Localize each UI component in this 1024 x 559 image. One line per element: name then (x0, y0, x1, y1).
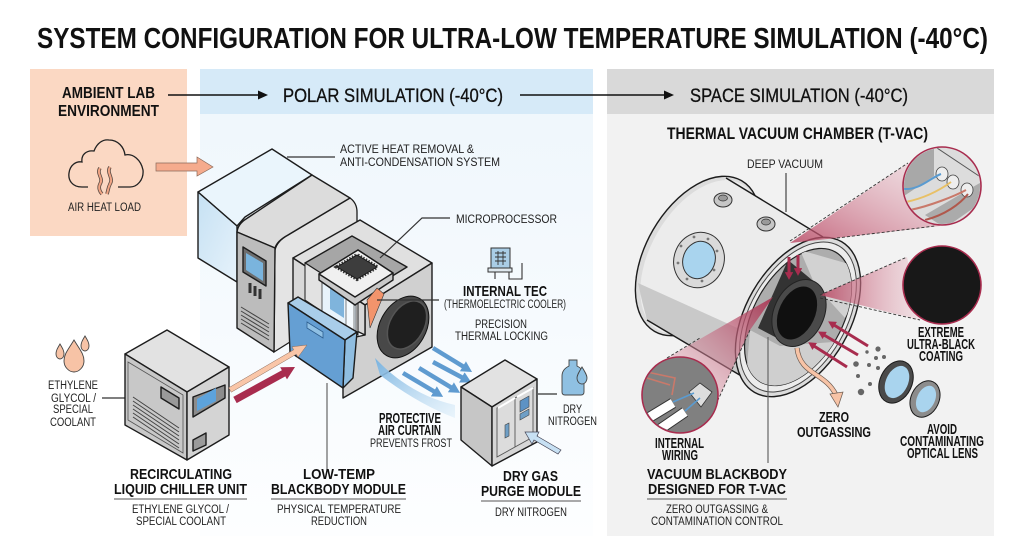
label: dry gas purge module: PURGE MODULE (481, 483, 581, 500)
arrow: outgassing (797, 348, 843, 407)
panel: ambient lab environment (30, 69, 187, 236)
ports (714, 193, 775, 231)
leader: low-temp blackbody (326, 383, 328, 470)
label: dry gas purge module: DRY GAS (503, 468, 558, 485)
arrow: coolant supply (229, 345, 307, 392)
label: coolant: COOLANT (50, 417, 96, 429)
label: low-temp blackbody module (271, 466, 406, 528)
label: precision thermal locking: PRECISION (475, 319, 527, 331)
lens port (367, 287, 439, 367)
arrow: coolant return (233, 367, 295, 403)
leader: deep vacuum (785, 173, 787, 212)
polar heading: POLAR SIMULATION (-40°C) (283, 86, 503, 107)
magnifier cone: internal wiring (667, 297, 773, 400)
label: avoid contaminating lens: OPTICAL LENS (907, 445, 978, 462)
panel: polar simulation (200, 69, 593, 536)
label: recirculating chiller: ETHYLENE GLYCOL / (132, 504, 230, 516)
detail: bottom internal wiring (640, 357, 718, 436)
leader: coolant (102, 397, 125, 399)
leader: active heat removal (287, 156, 335, 158)
label: zero outgassing: OUTGASSING (797, 424, 871, 441)
label: ultra-black coating: EXTREME (918, 324, 964, 341)
air curtain sweep (375, 358, 455, 418)
space heading: SPACE SIMULATION (-40°C) (690, 86, 908, 107)
vacuum chamber (634, 176, 862, 398)
icon: microprocessor chip (337, 255, 377, 279)
blue blackbody panel (288, 297, 357, 388)
arrow: air heat load (156, 157, 213, 176)
viewing window (666, 225, 732, 295)
detail: top wiring terminals (900, 146, 985, 228)
arrow: ambient to polar (168, 90, 268, 100)
label: internal wiring (655, 435, 704, 464)
label: coolant (48, 380, 98, 429)
label: vacuum blackbody: DESIGNED FOR T-VAC (648, 481, 786, 498)
label: precision thermal locking (455, 319, 548, 343)
label: dry nitrogen (548, 404, 597, 428)
arrow: polar to space (520, 90, 674, 100)
label: active heat removal: ANTI-CONDENSATION SYSTEM (340, 157, 500, 169)
label: recirculating chiller: LIQUID CHILLER UNIT (114, 481, 247, 498)
cylinder body (609, 155, 823, 377)
label: ultra-black coating: COATING (919, 348, 963, 365)
label: protective air curtain (370, 410, 452, 450)
label: internal wiring: WIRING (662, 447, 698, 464)
label: active heat removal (340, 144, 500, 169)
air heat load label: AIR HEAT LOAD (68, 202, 141, 214)
chiller unit (125, 330, 229, 460)
label: recirculating chiller (114, 466, 247, 528)
label: thermal vacuum chamber: THERMAL VACUUM CHAMBER (T-VAC) (667, 125, 928, 143)
label: low-temp blackbody module: BLACKBODY MODULE (271, 481, 406, 498)
ambient heading: AMBIENT LAB (62, 85, 155, 102)
label: vacuum blackbody: ZERO OUTGASSING & (666, 504, 768, 516)
label: dry gas purge module (481, 468, 581, 519)
label: avoid contaminating lens (900, 421, 984, 462)
label: ultra-black coating: ULTRA-BLACK (907, 336, 975, 353)
optical lenses (872, 355, 946, 422)
icon: coolant drops (56, 336, 89, 372)
label: active heat removal: ACTIVE HEAT REMOVAL & (340, 144, 474, 156)
label: zero outgassing (797, 409, 871, 441)
dust particles (853, 346, 886, 395)
label: zero outgassing: ZERO (819, 409, 849, 426)
panel: space simulation (607, 69, 994, 536)
label: precision thermal locking: THERMAL LOCKING (455, 331, 548, 343)
label: microprocessor: MICROPROCESSOR (456, 214, 557, 226)
magnifier cone: coating (820, 257, 920, 320)
label: low-temp blackbody module: PHYSICAL TEMPERATURE (277, 504, 401, 516)
label: vacuum blackbody: VACUUM BLACKBODY (647, 466, 787, 483)
label: vacuum blackbody: CONTAMINATION CONTROL (651, 516, 784, 528)
label: vacuum blackbody (647, 466, 787, 528)
arrow: dry nitrogen inlet (525, 432, 561, 454)
leader: vacuum blackbody (767, 337, 769, 463)
recess (305, 236, 407, 297)
peach TEC wedge (367, 288, 384, 328)
low-temp module housing (288, 220, 439, 398)
magnifier cone: wiring top (790, 163, 940, 243)
label: dry gas purge module: DRY NITROGEN (495, 507, 567, 519)
label: protective air curtain: PREVENTS FROST (370, 438, 452, 450)
arrows: dry gas flow (403, 348, 464, 392)
front flange (734, 236, 862, 398)
cone dashed edges (667, 163, 935, 400)
leader: microprocessor (380, 218, 450, 258)
label: internal wiring: INTERNAL (655, 435, 704, 452)
chip plate (319, 250, 393, 305)
label: dry nitrogen: DRY (563, 404, 582, 416)
label: internal TEC: INTERNAL TEC (463, 283, 547, 300)
label: recirculating chiller: RECIRCULATING (130, 466, 232, 483)
icon: TEC (488, 248, 522, 279)
label: coolant: GLYCOL / (51, 393, 97, 405)
label: deep vacuum: DEEP VACUUM (747, 159, 823, 171)
arrows: radiation into hole (789, 255, 868, 367)
label: dry nitrogen: NITROGEN (548, 416, 597, 428)
detail: ultra-black coating (903, 246, 981, 324)
gray control cabinet (237, 175, 357, 352)
ambient heading (58, 85, 159, 120)
label: coolant: ETHYLENE (48, 380, 98, 392)
label: internal TEC (444, 283, 566, 311)
label: ultra-black coating (907, 324, 975, 365)
label: low-temp blackbody module: LOW-TEMP (303, 466, 375, 483)
support columns (322, 280, 356, 340)
label: internal TEC: (THERMOELECTRIC COOLER) (444, 299, 566, 311)
label: recirculating chiller: SPECIAL COOLANT (136, 516, 226, 528)
icon: nitrogen bottle (562, 360, 587, 395)
label: avoid contaminating lens: AVOID (927, 421, 957, 438)
label: protective air curtain: AIR CURTAIN (378, 422, 441, 439)
label: avoid contaminating lens: CONTAMINATING (900, 433, 984, 450)
icon: cloud with heat waves (69, 140, 143, 194)
ambient heading: ENVIRONMENT (58, 103, 159, 120)
purge module (461, 360, 537, 466)
active heat removal unit (198, 149, 357, 352)
label: coolant: SPECIAL (53, 404, 93, 416)
label: protective air curtain: PROTECTIVE (379, 410, 441, 427)
leader: dry nitrogen (538, 393, 557, 395)
label: low-temp blackbody module: REDUCTION (311, 516, 367, 528)
leader: TEC (377, 299, 439, 301)
